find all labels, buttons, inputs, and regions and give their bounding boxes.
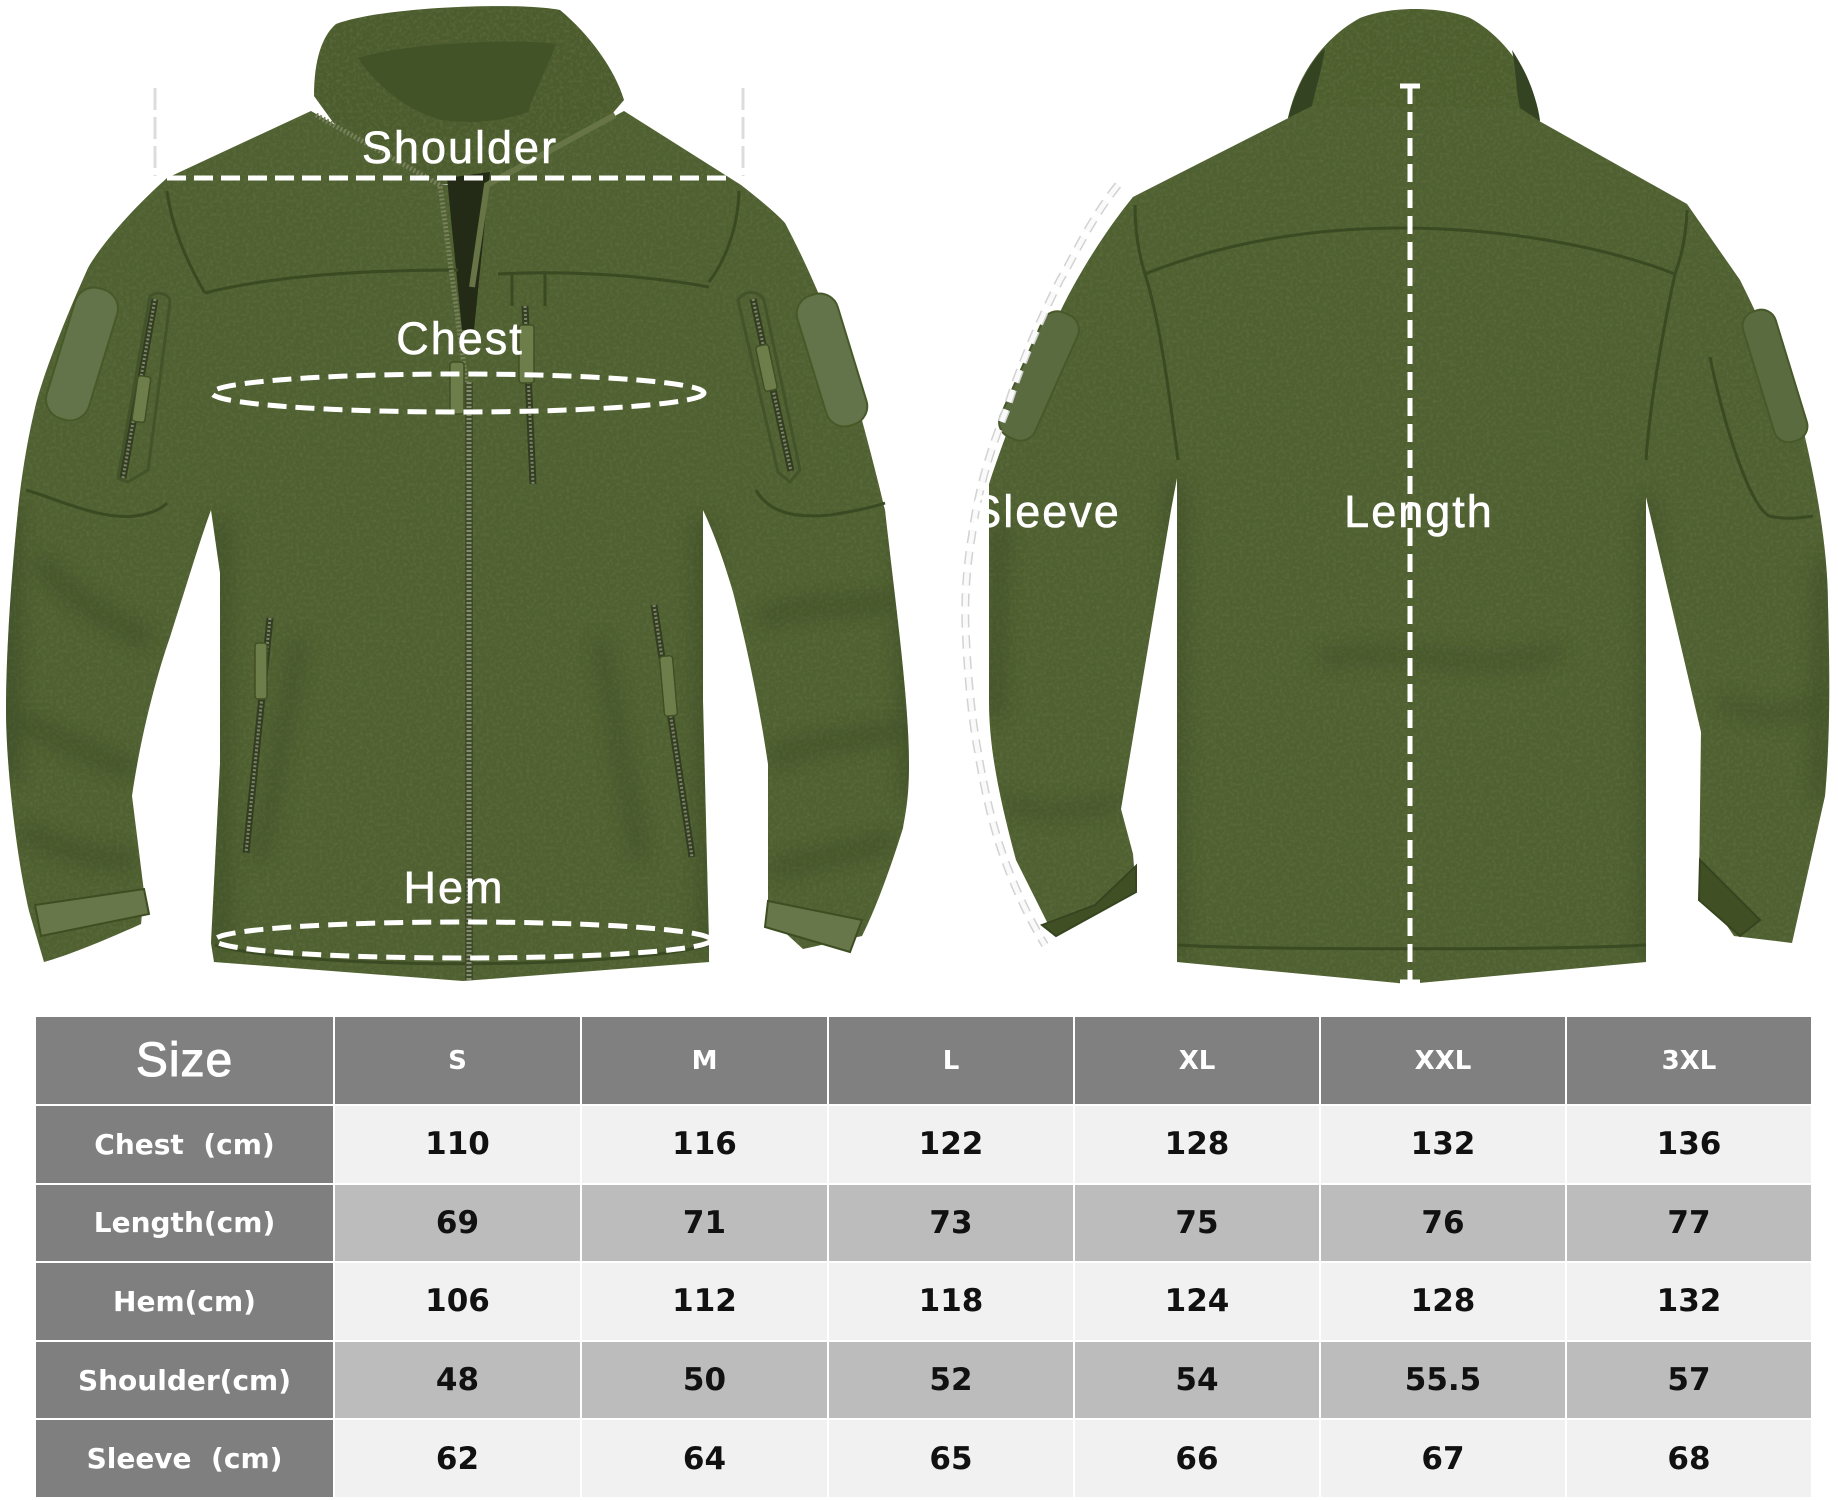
length measurement line: [1400, 86, 1420, 982]
size chart table: 132: [1657, 1283, 1721, 1319]
back jacket sleeve patches: [994, 306, 1811, 446]
size chart table: 136: [1657, 1126, 1721, 1162]
front jacket body and sleeves: [6, 111, 909, 981]
size chart table: 48: [436, 1362, 479, 1398]
size chart table: 55.5: [1405, 1362, 1481, 1398]
label: Shoulder: Shoulder: [362, 122, 558, 173]
size chart table: XL: [1179, 1046, 1215, 1076]
size chart table: Shoulder(cm): [78, 1364, 291, 1397]
label: Sleeve: Sleeve: [971, 486, 1121, 537]
sleeve patches: [41, 283, 872, 431]
label: Length: Length: [1344, 486, 1494, 537]
back jacket collar shadow sides: [1288, 48, 1540, 121]
hem measurement ellipse: [215, 922, 711, 958]
size chart table: 122: [919, 1126, 983, 1162]
sleeve measurement line: [965, 185, 1118, 945]
size chart table: 128: [1411, 1283, 1475, 1319]
back jacket: [989, 9, 1829, 984]
front jacket shading: [10, 500, 912, 950]
size chart table: 65: [929, 1441, 973, 1477]
size chart table: 3XL: [1662, 1046, 1716, 1076]
size chart table: 57: [1667, 1362, 1711, 1398]
size chart table: Sleeve (cm): [87, 1442, 282, 1475]
back jacket collar: [1288, 9, 1540, 140]
back jacket shading: [995, 480, 1825, 960]
label: Chest: Chest: [396, 313, 524, 364]
size chart table: Length(cm): [94, 1206, 275, 1239]
front jacket seams: [26, 191, 885, 964]
front center zipper: [316, 115, 615, 980]
size chart table: S: [448, 1046, 467, 1076]
size chart table: 54: [1175, 1362, 1219, 1398]
size chart table: 132: [1411, 1126, 1475, 1162]
size chart table: 50: [683, 1362, 726, 1398]
size chart table: 110: [425, 1126, 490, 1162]
front jacket neck opening: [447, 172, 490, 330]
size chart table: 66: [1175, 1441, 1219, 1477]
size chart table: 52: [929, 1362, 973, 1398]
size chart table: 71: [683, 1205, 726, 1241]
size chart table: 69: [436, 1205, 479, 1241]
size chart table: 124: [1165, 1283, 1229, 1319]
front jacket: [6, 6, 912, 981]
size chart table: 77: [1667, 1205, 1711, 1241]
label: Hem: Hem: [403, 862, 505, 913]
size chart table: 75: [1175, 1205, 1219, 1241]
size chart table: 62: [436, 1441, 479, 1477]
size chart table: 116: [672, 1126, 737, 1162]
size chart table: 68: [1667, 1441, 1711, 1477]
size chart table: Size: [136, 1034, 233, 1087]
size chart table: 118: [919, 1283, 983, 1319]
chest measurement ellipse: [212, 374, 704, 412]
size chart table: Hem(cm): [113, 1285, 256, 1318]
size chart table: L: [943, 1046, 959, 1076]
size chart table: 112: [672, 1283, 737, 1319]
shoulder measurement line: [167, 176, 742, 180]
cuff straps: [35, 889, 862, 952]
size chart table: 106: [425, 1283, 490, 1319]
front jacket collar lining: [358, 42, 556, 122]
size chart table: 67: [1421, 1441, 1465, 1477]
shoulder guide marks: [155, 88, 743, 176]
size chart table: M: [692, 1046, 717, 1076]
sleeve and chest zippers: [123, 299, 791, 857]
back jacket cuffs: [1042, 860, 1760, 936]
size chart table: 64: [683, 1441, 726, 1477]
size chart table: Chest (cm): [94, 1128, 275, 1161]
size chart table: [36, 1017, 1811, 1497]
size chart table: 128: [1165, 1126, 1229, 1162]
back jacket body and sleeves: [989, 106, 1829, 984]
size chart table: 76: [1421, 1205, 1465, 1241]
front jacket collar: [314, 6, 624, 185]
size chart table: XXL: [1415, 1046, 1471, 1076]
back jacket seams: [1135, 205, 1813, 949]
zipper pull tabs: [132, 325, 778, 716]
size chart table: 73: [929, 1205, 973, 1241]
